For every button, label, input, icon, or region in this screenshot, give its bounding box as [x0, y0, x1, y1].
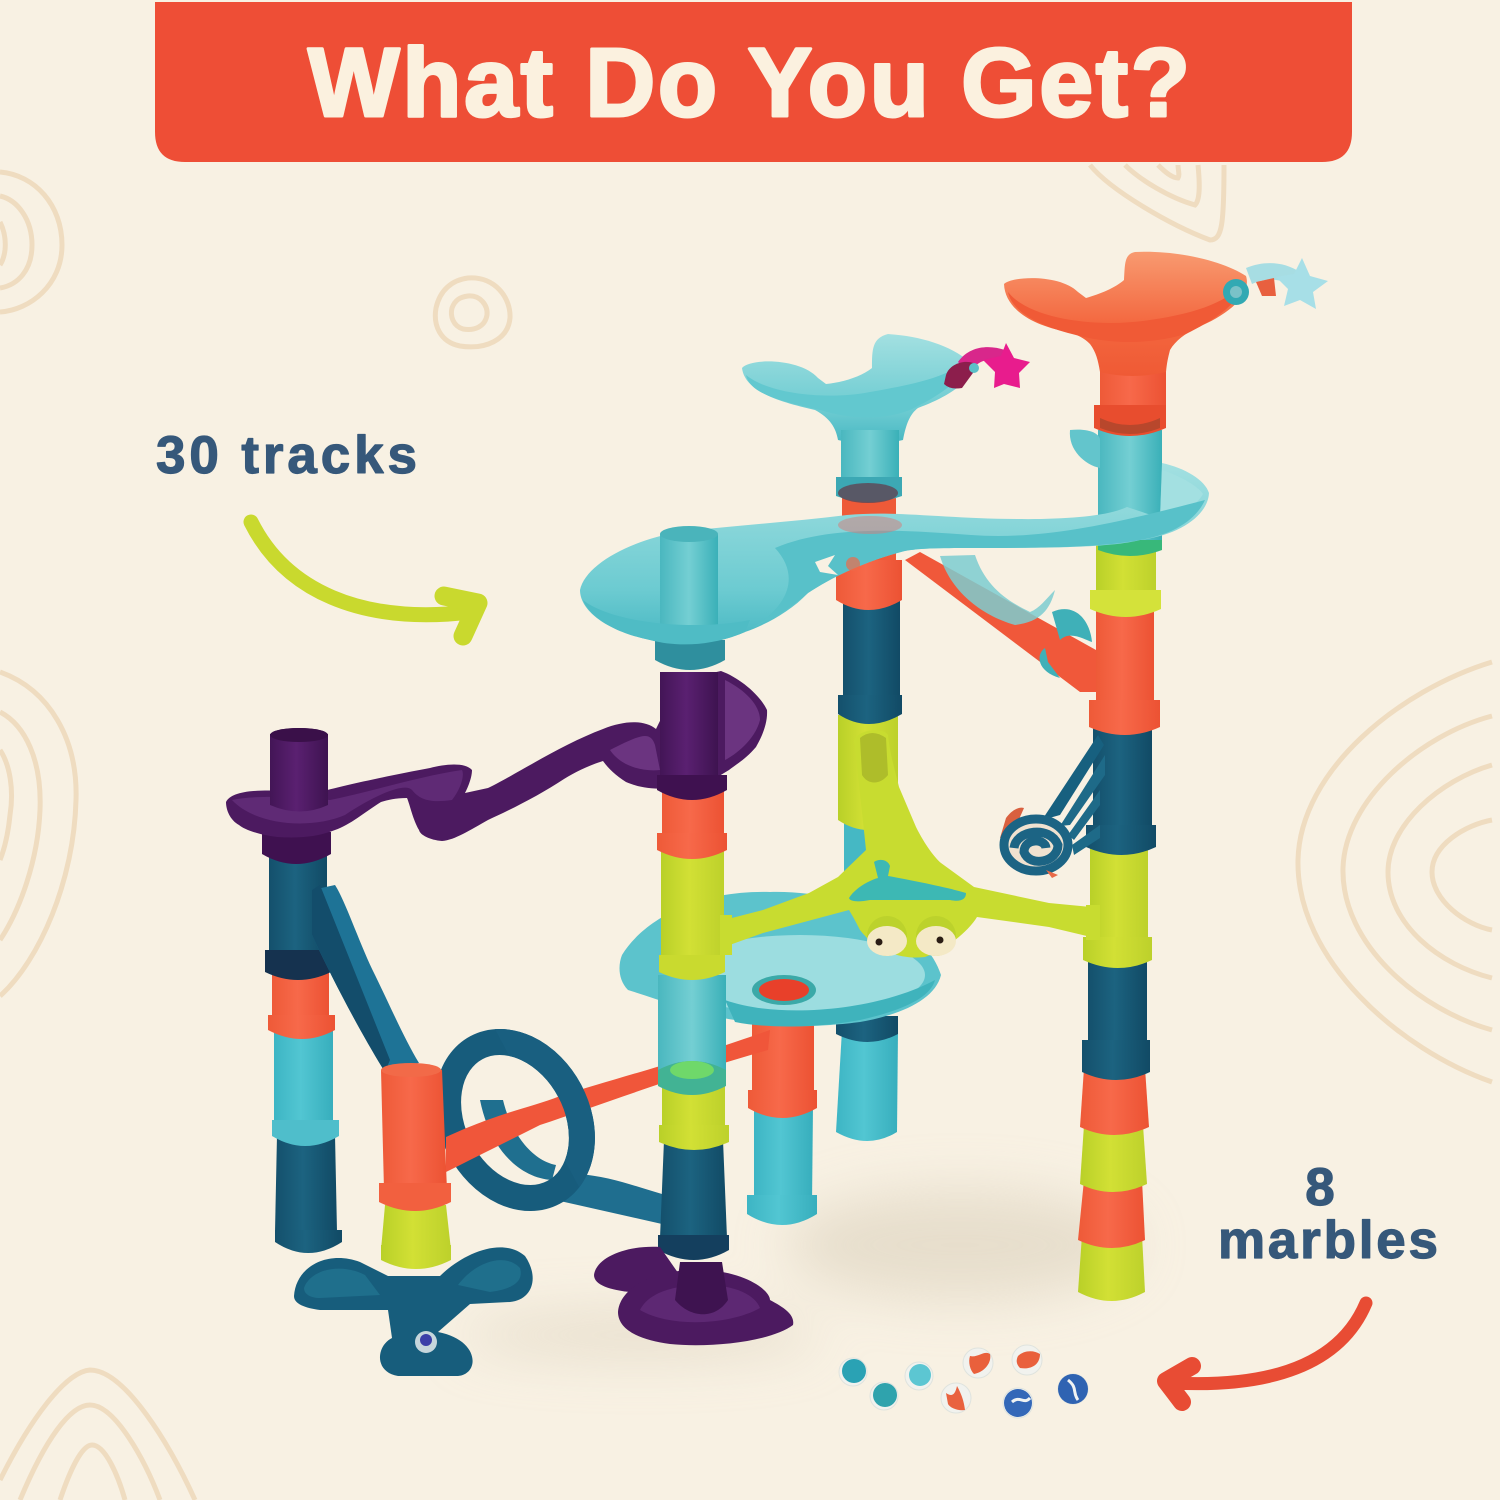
yellow branch track with eyes	[724, 730, 1091, 958]
blue lower track	[560, 1174, 662, 1224]
header banner	[155, 2, 1352, 162]
marbles	[839, 1345, 1088, 1418]
marble run toy	[226, 252, 1328, 1376]
title: What Do You Get?	[308, 28, 1190, 137]
label: 8 marbles	[1218, 1158, 1438, 1270]
arrow: tracks	[251, 522, 478, 636]
teal three-lobed base	[294, 1247, 533, 1376]
blue diagonal track	[312, 885, 419, 1072]
blue star	[1223, 258, 1328, 309]
teal ribbon track and bowl	[580, 463, 1209, 644]
orange cross track	[446, 1030, 770, 1172]
short orange tower	[379, 1063, 451, 1269]
ring front arc	[495, 1029, 595, 1175]
blue loop ring	[422, 1018, 608, 1222]
left tower	[262, 728, 342, 1253]
pink star	[944, 343, 1030, 388]
label: 30 tracks: 30 tracks	[156, 426, 417, 485]
left-middle tower	[657, 790, 729, 1260]
label: 8 marbles: 8	[1305, 1158, 1335, 1217]
blue spiral wheel	[1000, 735, 1105, 878]
purple wavy track	[226, 671, 767, 841]
back tower: rear short	[747, 1020, 817, 1225]
purple base	[594, 1247, 793, 1345]
back tower: middle upper	[836, 495, 902, 1141]
right tower	[1070, 367, 1166, 1301]
platform dish	[620, 892, 941, 1026]
ground shadows	[460, 1190, 1135, 1357]
diagonal orange track	[905, 552, 1096, 692]
teal funnel	[742, 334, 971, 444]
orange funnel	[1004, 252, 1247, 376]
teal cup inside bowl	[583, 526, 750, 670]
arrow: marbles	[1166, 1303, 1366, 1402]
yellow tower front joint	[720, 905, 1100, 955]
label: 8 marbles: marbles	[1218, 1211, 1438, 1270]
middle tower neck	[836, 430, 902, 503]
